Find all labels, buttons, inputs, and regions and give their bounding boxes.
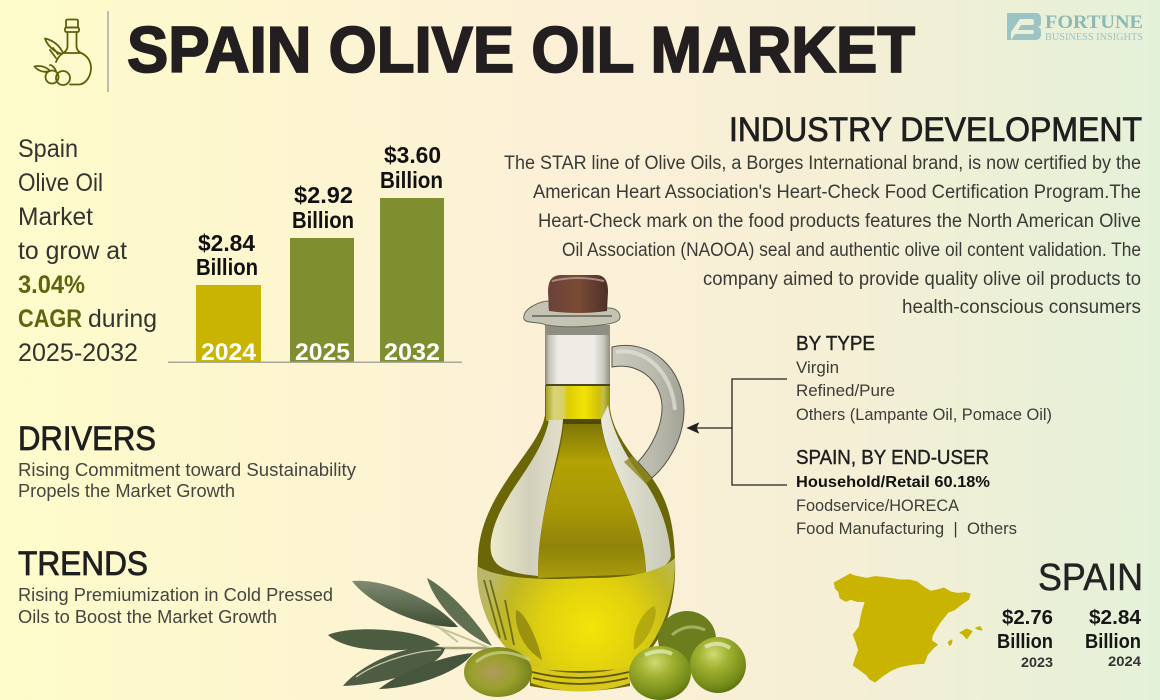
panel: by end-user [796,447,1017,538]
panel: trends: Oils to Boost the Market Growth [18,606,277,627]
panel: trends [18,545,333,627]
panel: industry development: Heart-Check mark on the food products features the North American Olive [538,211,1141,232]
illustration: olives [464,611,746,700]
panel: Spain market values: 2024 [1108,653,1141,669]
jug handle [612,345,684,478]
map: Spain [834,574,982,682]
panel: by type: Virgin [796,359,839,377]
panel: drivers: Rising Commitment toward Sustainability [18,459,357,480]
bar 2025: $2.92 [294,182,353,208]
panel: drivers [18,420,357,501]
logo: Fortune Business Insights: FORTUNE [1045,12,1143,33]
right glass reflection [601,405,671,573]
panel: Spain market values: SPAIN [1038,557,1143,599]
cork [548,275,608,313]
panel: Spain market values [997,557,1143,670]
text: CAGR statement: Spain [18,135,78,163]
text: CAGR statement: 2025-2032 [18,339,138,367]
bar chart [168,142,462,366]
panel: industry development: The STAR line of Olive Oils, a Borges International brand, is now certified by the [504,153,1141,174]
lower bowl [477,558,675,671]
panel: by type: Others (Lampante Oil, Pomace Oil) [796,406,1052,424]
panel: industry development: health-conscious consumers [902,297,1141,318]
arrow: segmentation bracket [688,379,787,485]
bar 2024: $2.84 [198,230,255,256]
panel: drivers: Propels the Market Growth [18,480,235,501]
icon: olive oil bottle [34,20,91,85]
text: CAGR statement: Olive Oil [18,169,103,197]
jug lip [524,301,620,327]
left glass reflection [491,420,563,576]
text: CAGR statement [18,135,157,367]
text: CAGR statement: CAGR [18,305,82,333]
bar 2024: 2024 [201,339,257,366]
panel: trends: TRENDS [18,545,148,583]
logo: Fortune Business Insights: BUSINESS INSIGHTS [1045,32,1143,43]
bar 2032: 2032 [384,339,440,366]
oil surface band [546,385,610,421]
panel: Spain market values: $2.76 [1002,607,1053,629]
handle joint [624,456,652,484]
jug neck [545,325,610,385]
jug body [478,385,675,691]
panel: by end-user: SPAIN, BY END-USER [796,447,989,469]
jug base [531,666,630,692]
bar 2025: 2025 [295,339,350,366]
panel: Spain market values: Billion [1085,631,1141,653]
bar 2032: Billion [380,167,443,193]
panel: by end-user: Foodservice/HORECA [796,497,959,515]
text: CAGR statement: Market [18,203,93,231]
bar 2032: $3.60 [384,142,441,168]
panel: by end-user: Food Manufacturing | Others [796,520,1017,538]
panel: by end-user: Household/Retail 60.18% [796,474,990,491]
panel: industry development [504,111,1142,318]
panel: industry development: company aimed to provide quality olive oil products to [703,269,1141,290]
illustration: olive oil jug [477,275,684,692]
bar 2025 [290,182,354,366]
bar 2024: Billion [196,254,258,280]
illustration: olive sprig [328,578,492,689]
logo: Fortune Business Insights [1007,12,1143,43]
panel: trends: Rising Premiumization in Cold Pressed [18,584,333,605]
central oil [538,423,646,578]
title: SPAIN OLIVE OIL MARKET [127,13,915,86]
panel: Spain market values: $2.84 [1089,607,1142,629]
bar 2024 [196,230,261,366]
text: CAGR statement: during [88,305,157,333]
text: CAGR statement: 3.04% [18,271,85,299]
panel: Spain market values: Billion [997,631,1053,653]
bar 2025: Billion [292,207,354,233]
olive reflections [516,610,542,660]
header divider [107,11,109,92]
panel: Spain market values: 2023 [1021,654,1053,670]
text: CAGR statement: to grow at [18,237,127,265]
panel: by type: BY TYPE [796,333,875,355]
panel: by type [796,333,1052,424]
panel: drivers: DRIVERS [18,420,156,458]
panel: industry development: American Heart Association's Heart-Check Food Certification Program.The [533,182,1141,203]
panel: by type: Refined/Pure [796,382,895,400]
bar 2032 [380,142,444,366]
